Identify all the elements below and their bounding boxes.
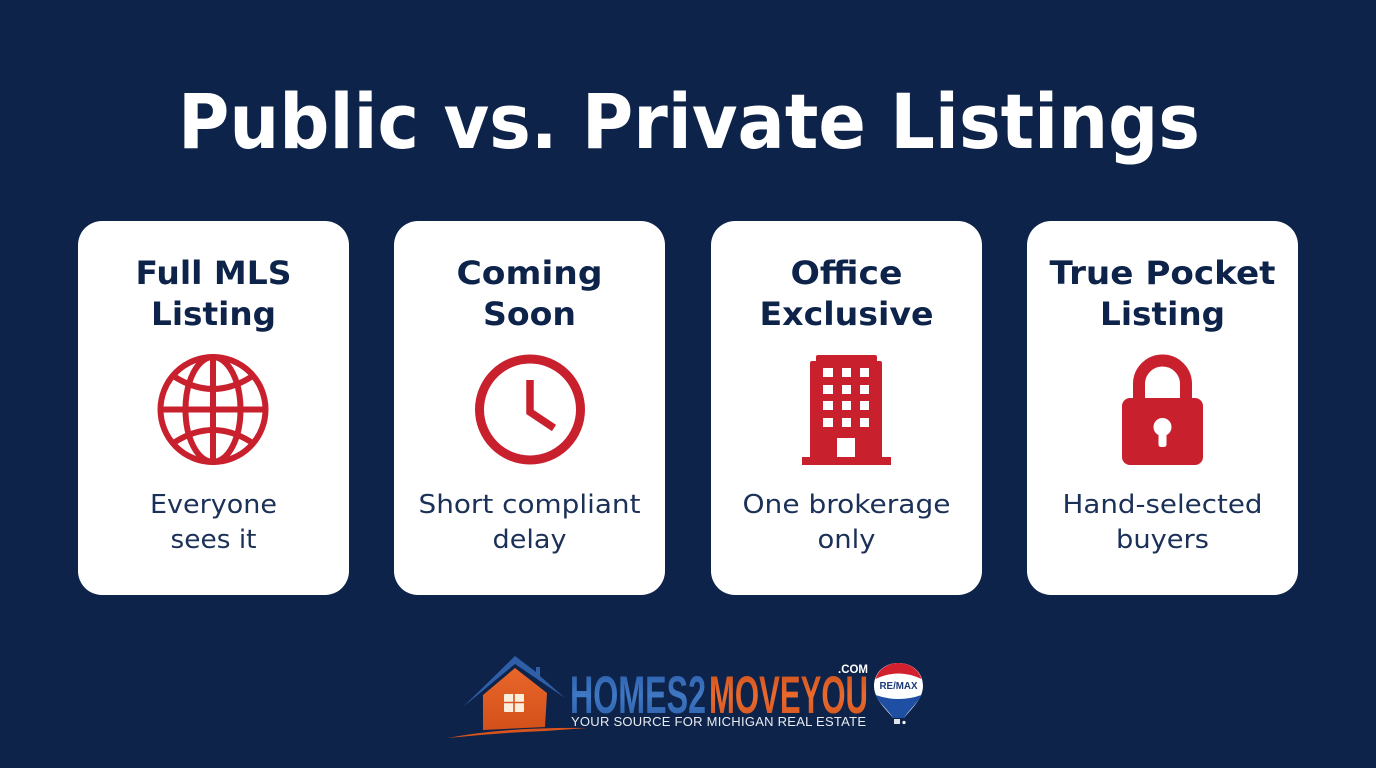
text: Short compliant delay: Short compliant — [418, 490, 640, 520]
heading: Full MLS Listing — [136, 254, 292, 333]
icon: RE/MAX balloon: RE/MAX — [880, 680, 918, 692]
text: Everyone sees it — [150, 490, 277, 555]
title: Public vs. Private Listings — [178, 77, 1200, 166]
text: Everyone sees it: Everyone — [150, 490, 277, 520]
heading: Coming Soon: Soon — [483, 295, 576, 333]
wordmark: HOMES2 — [570, 666, 706, 725]
heading: Full MLS Listing: Listing — [151, 295, 276, 333]
text: Short compliant delay: delay — [492, 525, 566, 555]
panel: True Pocket Listing — [1027, 221, 1298, 595]
heading: Coming Soon — [456, 254, 602, 333]
heading: Full MLS Listing: Full MLS — [136, 254, 292, 292]
heading: True Pocket Listing: Listing — [1100, 295, 1225, 333]
logo: Homes2MoveYou — [448, 656, 923, 738]
wordmark: .COM — [838, 662, 868, 676]
panel: Full MLS Listing — [78, 221, 349, 595]
icon: office building — [802, 355, 891, 465]
heading: Office Exclusive: Exclusive — [760, 295, 934, 333]
icon: globe — [160, 357, 266, 462]
panel: Office Exclusive — [711, 221, 982, 595]
wordmark: MOVEYOU — [709, 666, 868, 725]
wordmark — [570, 662, 868, 729]
text: One brokerage only: One brokerage — [742, 490, 950, 520]
icon: padlock — [1122, 360, 1203, 465]
icon: house — [448, 656, 587, 738]
heading: True Pocket Listing: True Pocket — [1050, 254, 1276, 292]
text: One brokerage only — [742, 490, 950, 555]
icon: clock — [480, 359, 580, 460]
text: Hand-selected buyers: Hand-selected — [1062, 490, 1262, 520]
panel: Coming Soon — [394, 221, 665, 595]
text: Everyone sees it: sees it — [170, 525, 256, 555]
heading: Coming Soon: Coming — [456, 254, 602, 292]
text: Hand-selected buyers — [1062, 490, 1262, 555]
icon: RE/MAX balloon — [874, 663, 923, 724]
heading: Office Exclusive — [760, 254, 934, 333]
wordmark: YOUR SOURCE FOR MICHIGAN REAL ESTATE — [571, 714, 866, 729]
heading: True Pocket Listing — [1050, 254, 1276, 333]
heading: Office Exclusive: Office — [790, 254, 902, 292]
text: Hand-selected buyers: buyers — [1116, 525, 1209, 555]
text: One brokerage only: only — [818, 525, 876, 555]
text: Short compliant delay — [418, 490, 640, 555]
